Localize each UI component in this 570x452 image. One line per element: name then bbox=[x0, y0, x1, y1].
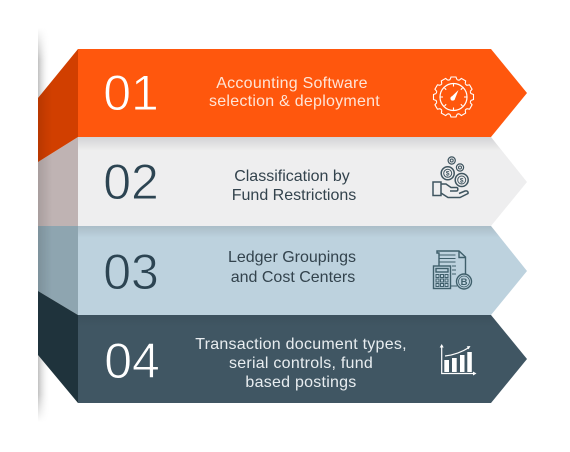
text 03: Ledger Groupings bbox=[228, 249, 356, 266]
icon: hand with coins: $ bbox=[460, 177, 464, 184]
text 02: Fund Restrictions bbox=[232, 187, 356, 204]
panel: step 04 bbox=[38, 291, 527, 403]
side face 03 bbox=[38, 226, 78, 315]
text 03: and Cost Centers bbox=[231, 269, 355, 286]
text 01: selection & deployment bbox=[209, 93, 380, 110]
icon: calculator and document: B bbox=[461, 277, 468, 288]
panel: step 03 bbox=[38, 226, 527, 315]
number 01: 01 bbox=[103, 65, 159, 121]
text 04: Transaction document types, bbox=[195, 336, 407, 353]
icon: hand with coins: $ bbox=[446, 171, 450, 178]
side face 01 bbox=[38, 49, 78, 162]
icon: calculator and document bbox=[434, 251, 472, 289]
icon: hand with coins bbox=[433, 157, 468, 198]
text 02: Classification by bbox=[234, 168, 350, 185]
panel: step 01 bbox=[38, 49, 527, 162]
number 04: 04 bbox=[104, 333, 160, 389]
number 02: 02 bbox=[103, 154, 159, 210]
text 04: serial controls, fund bbox=[229, 355, 373, 372]
side face 02 bbox=[38, 137, 78, 226]
band 01 bbox=[78, 49, 527, 137]
icon: rising bar chart bbox=[440, 344, 476, 376]
text 04: based postings bbox=[245, 374, 357, 391]
icon: gear with gauge bbox=[434, 77, 474, 117]
band 03 bbox=[78, 226, 527, 315]
wall shadow at left bbox=[38, 28, 50, 422]
band 02 bbox=[78, 137, 527, 226]
band 04 bbox=[78, 315, 527, 403]
text 01: Accounting Software bbox=[216, 75, 368, 92]
panel: step 02 bbox=[38, 137, 527, 226]
number 03: 03 bbox=[103, 244, 159, 300]
side face 04 bbox=[38, 291, 78, 403]
